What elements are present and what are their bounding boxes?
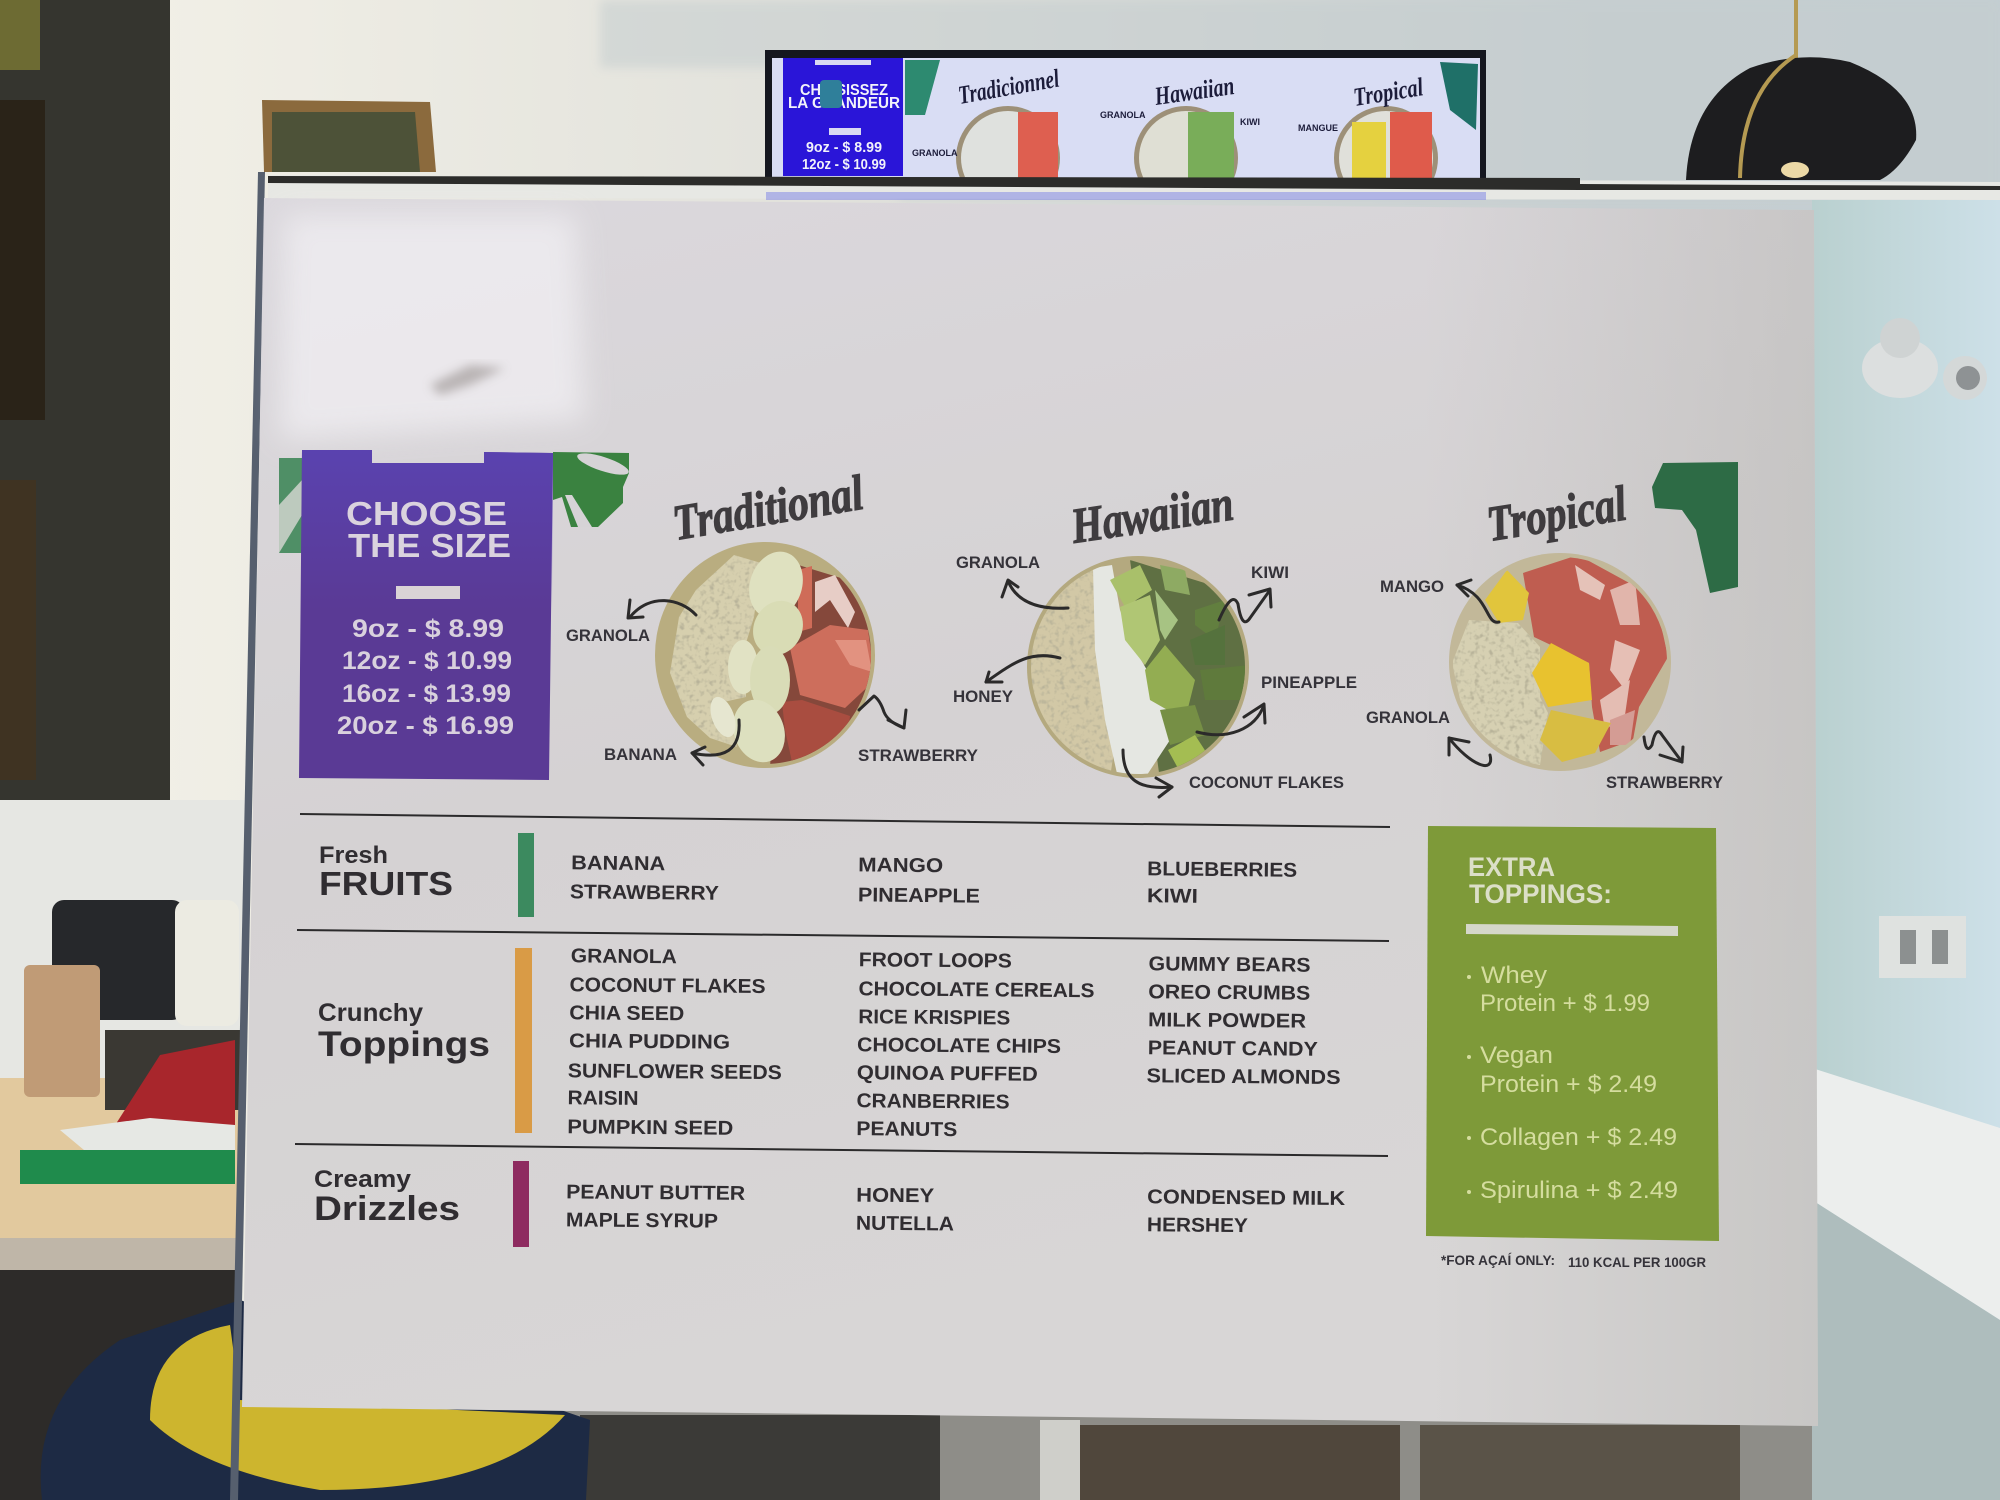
decorative leaf right	[553, 449, 631, 527]
label: coconut flakes: COCONUT FLAKES	[1189, 773, 1344, 792]
drizzles column 3	[1147, 1186, 1346, 1238]
background: counter and cabinet	[0, 1078, 240, 1500]
arrow: strawberry	[1644, 732, 1683, 762]
background: glass top edge	[268, 175, 2000, 200]
background: wall-mounted screen: MANGUE	[1298, 123, 1338, 133]
title: Hawaiian: Hawaiian	[1067, 475, 1237, 554]
background: framed picture	[262, 100, 436, 172]
heading: crunchy toppings	[318, 999, 490, 1064]
background: pendant lamp	[1686, 0, 1916, 272]
topping: vegan protein: Protein + $ 2.49	[1480, 1071, 1657, 1098]
topping: whey protein: Protein + $ 1.99	[1480, 990, 1650, 1017]
heading: extra toppings: TOPPINGS:	[1469, 879, 1612, 909]
size prices: 20oz - $ 16.99	[337, 712, 514, 740]
bowl: Hawaiian	[1026, 556, 1260, 780]
heading: creamy drizzles: Drizzles	[314, 1190, 460, 1228]
topping: vegan protein	[1467, 1042, 1657, 1098]
fruits column 2	[858, 854, 980, 908]
decorative leaf left	[279, 458, 302, 553]
heading: extra toppings	[1468, 852, 1612, 909]
toppings column 2	[856, 949, 1095, 1142]
heading: fresh fruits	[319, 842, 453, 902]
panel: extra toppings	[1426, 826, 1719, 1241]
heading: fresh fruits: Fresh	[319, 842, 388, 869]
arrow: strawberry	[859, 696, 906, 728]
toppings column 3: MILK POWDER	[1148, 1009, 1307, 1033]
background: security sensor	[1862, 318, 1987, 400]
toppings column 2: CHOCOLATE CEREALS	[858, 978, 1095, 1002]
label: kiwi: KIWI	[1251, 563, 1289, 582]
size prices	[337, 615, 514, 740]
background: wall-mounted screen	[765, 50, 1486, 178]
background: fruit basket	[41, 1300, 590, 1500]
background: counter items	[20, 900, 240, 1184]
background: wall-mounted screen: Tropical	[1351, 72, 1426, 112]
heading: creamy drizzles: Creamy	[314, 1166, 412, 1193]
arrow: mango	[1457, 580, 1499, 622]
drizzles column 2	[856, 1185, 954, 1235]
fruits column 2: MANGO	[858, 854, 943, 877]
row: crunchy toppings	[318, 945, 1342, 1142]
toppings column 3: PEANUT CANDY	[1148, 1037, 1319, 1061]
drizzles column 3: HERSHEY	[1147, 1214, 1249, 1237]
heading: crunchy toppings: Toppings	[318, 1025, 490, 1064]
background: wall shadow	[600, 0, 2000, 200]
row: creamy drizzles	[314, 1161, 1346, 1247]
label: granola: GRANOLA	[956, 553, 1040, 572]
drizzles column 1	[566, 1181, 746, 1233]
toppings column 1: RAISIN	[567, 1087, 639, 1110]
background: wall-mounted screen: CHOISISSEZ	[800, 82, 888, 99]
toppings column 2: PEANUTS	[856, 1118, 957, 1141]
label: honey: HONEY	[953, 687, 1014, 706]
toppings column 1: COCONUT FLAKES	[569, 974, 766, 998]
toppings column 1	[567, 945, 783, 1140]
toppings column 1: CHIA PUDDING	[569, 1030, 730, 1054]
topping: spirulina: Spirulina + $ 2.49	[1480, 1177, 1678, 1204]
toppings column 2: QUINOA PUFFED	[857, 1062, 1038, 1086]
label: banana: BANANA	[604, 745, 677, 764]
heading: choose the size: THE SIZE	[348, 527, 511, 564]
arrow: pineapple	[1197, 704, 1265, 735]
background: wall-mounted screen: KIWI	[1240, 117, 1260, 127]
fruits column 1: BANANA	[571, 852, 665, 875]
toppings column 2: FROOT LOOPS	[859, 949, 1012, 973]
color bar: orange	[515, 948, 532, 1133]
footnote: *FOR AÇAÍ ONLY:	[1441, 1252, 1555, 1268]
heading: choose the size	[346, 495, 511, 564]
arrow: granola	[1449, 738, 1491, 766]
toppings column 2: CHOCOLATE CHIPS	[857, 1034, 1061, 1058]
arrow: granola	[628, 600, 696, 618]
label: strawberry: STRAWBERRY	[858, 746, 979, 765]
background: light switch	[1879, 916, 1966, 978]
toppings column 3: SLICED ALMONDS	[1146, 1065, 1341, 1089]
divider bar	[396, 586, 460, 599]
row: fresh fruits	[319, 833, 1297, 917]
footnote: 110 KCAL PER 100GR	[1568, 1254, 1706, 1270]
heading: choose the size: CHOOSE	[346, 495, 507, 532]
panel: choose the size	[299, 450, 553, 780]
arrow: coconut flakes	[1123, 750, 1172, 797]
toppings column 1: PUMPKIN SEED	[567, 1116, 733, 1140]
fruits column 1	[570, 852, 720, 905]
heading: creamy drizzles	[314, 1166, 460, 1228]
drizzles column 1: PEANUT BUTTER	[566, 1181, 746, 1205]
divider bar	[1466, 924, 1678, 936]
fruits column 3: KIWI	[1147, 885, 1198, 908]
label: strawberry: STRAWBERRY	[1606, 773, 1724, 792]
title: Traditional: Traditional	[669, 464, 867, 551]
label: granola: GRANOLA	[1366, 708, 1450, 727]
background: glass left edge	[230, 172, 265, 1500]
toppings column 3	[1146, 953, 1342, 1089]
label: mango: MANGO	[1380, 577, 1444, 596]
color bar: magenta	[513, 1161, 529, 1247]
heading: extra toppings: EXTRA	[1468, 852, 1555, 882]
background: below poster	[240, 1410, 2000, 1500]
drizzles column 3: CONDENSED MILK	[1147, 1186, 1346, 1210]
topping: vegan protein: Vegan	[1480, 1042, 1553, 1069]
drizzles column 1: MAPLE SYRUP	[566, 1209, 718, 1233]
size prices: 12oz - $ 10.99	[342, 647, 512, 675]
drizzles column 2: HONEY	[856, 1185, 935, 1207]
arrow: kiwi	[1219, 589, 1271, 622]
bowl: Traditional	[655, 542, 880, 770]
toppings column 1: SUNFLOWER SEEDS	[568, 1060, 782, 1084]
title: Tropical: Tropical	[1483, 475, 1630, 552]
background: wall-mounted screen: 9oz - $ 8.99	[806, 139, 882, 156]
background: wall-mounted screen: GRANOLA	[1100, 110, 1146, 120]
fruits column 3: BLUEBERRIES	[1147, 858, 1297, 882]
drizzles column 2: NUTELLA	[856, 1213, 954, 1235]
arrow: granola	[1002, 580, 1068, 608]
background: white counter right	[1812, 1068, 2000, 1500]
heading: fresh fruits: FRUITS	[319, 865, 453, 902]
label: pineapple: PINEAPPLE	[1261, 673, 1357, 692]
toppings column 3: OREO CRUMBS	[1148, 981, 1310, 1005]
background: dark shelf	[0, 0, 170, 800]
bowl: Tropical	[1449, 553, 1671, 771]
size prices: 16oz - $ 13.99	[342, 680, 511, 708]
topping: whey protein: Whey	[1481, 962, 1547, 989]
label: granola: GRANOLA	[566, 626, 650, 645]
background: tiled wall lower left	[0, 800, 245, 1080]
toppings column 2: CRANBERRIES	[856, 1090, 1010, 1114]
arrow: honey	[986, 656, 1060, 682]
fruits column 3	[1147, 858, 1297, 909]
background: wall-mounted screen: Hawaiian	[1152, 71, 1236, 111]
background: wall-mounted screen: Tradicionnel	[956, 64, 1062, 110]
size prices: 9oz - $ 8.99	[352, 615, 504, 643]
topping: collagen: Collagen + $ 2.49	[1480, 1124, 1677, 1151]
background: glass panel right side	[1812, 200, 2000, 1500]
toppings column 1: GRANOLA	[571, 945, 677, 968]
color bar: green	[518, 833, 534, 917]
toppings column 2: RICE KRISPIES	[858, 1006, 1010, 1030]
background: wall-mounted screen: GRANOLA	[912, 148, 958, 158]
toppings column 1: CHIA SEED	[569, 1002, 684, 1025]
decorative leaf top right	[1652, 462, 1738, 593]
background: wall-mounted screen: LA GRANDEUR	[788, 95, 900, 112]
fruits column 1: STRAWBERRY	[570, 881, 720, 905]
panel: menu poster	[242, 198, 1818, 1426]
arrow: banana	[692, 720, 739, 765]
background: wall-mounted screen: 12oz - $ 10.99	[802, 156, 886, 173]
topping: whey protein	[1467, 962, 1650, 1017]
heading: crunchy toppings: Crunchy	[318, 999, 423, 1027]
footnote	[1441, 1252, 1706, 1270]
fruits column 2: PINEAPPLE	[858, 884, 980, 908]
toppings column 3: GUMMY BEARS	[1148, 953, 1311, 977]
